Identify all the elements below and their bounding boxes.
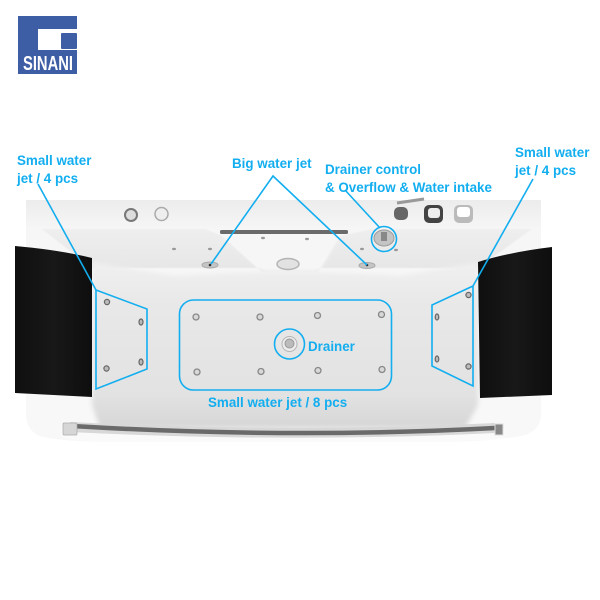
- central raised wedge: [222, 234, 340, 272]
- callout shapes: [38, 176, 533, 390]
- drainer control fitting: [374, 230, 394, 246]
- logo: SINANI: SINANI: [23, 53, 73, 75]
- front edge highlight: [60, 428, 505, 442]
- floor jets: [193, 312, 385, 375]
- label: right small water jet: jet / 4 pcs: [514, 163, 576, 178]
- right jet area outline: [432, 286, 473, 386]
- drainer ring: [274, 329, 304, 359]
- drainer control ring: [372, 226, 396, 252]
- label: small water jet 8 pcs: Small water jet / 8 pcs: [208, 395, 347, 410]
- small back wall jets: [172, 237, 398, 251]
- basin back wall: [42, 229, 532, 272]
- front grab rail: [63, 423, 503, 435]
- label: right small water jet: Small water: [515, 145, 590, 160]
- leader lines: big jets: [211, 176, 367, 265]
- big water jets and centre light: [202, 258, 375, 270]
- right black pillow: [478, 247, 552, 398]
- label: drainer control: Drainer control: [325, 162, 421, 177]
- label: drainer control: & Overflow & Water intake: [325, 180, 492, 195]
- label: left small water jet: Small water: [17, 153, 92, 168]
- left jet area outline: [96, 290, 147, 389]
- left black pillow: [15, 246, 92, 397]
- bathtub: [26, 199, 541, 442]
- left side jets: [104, 299, 143, 371]
- logo: SINANI: [18, 16, 77, 75]
- faucet handles: [394, 199, 473, 223]
- floor jet area outline: [180, 300, 392, 390]
- leader line: left small jets: [38, 184, 96, 290]
- basin floor: [92, 262, 478, 428]
- drain: [282, 336, 297, 352]
- right side jets: [435, 292, 471, 369]
- label: left small water jet: jet / 4 pcs: [16, 171, 78, 186]
- overflow bar: [220, 230, 348, 234]
- label: drainer: Drainer: [308, 339, 356, 354]
- leader line: drainer control: [345, 190, 380, 228]
- label: big water jet: Big water jet: [232, 156, 312, 171]
- leader line: right small jets: [473, 179, 533, 286]
- rim buttons: [125, 208, 168, 221]
- tub body: [26, 200, 541, 442]
